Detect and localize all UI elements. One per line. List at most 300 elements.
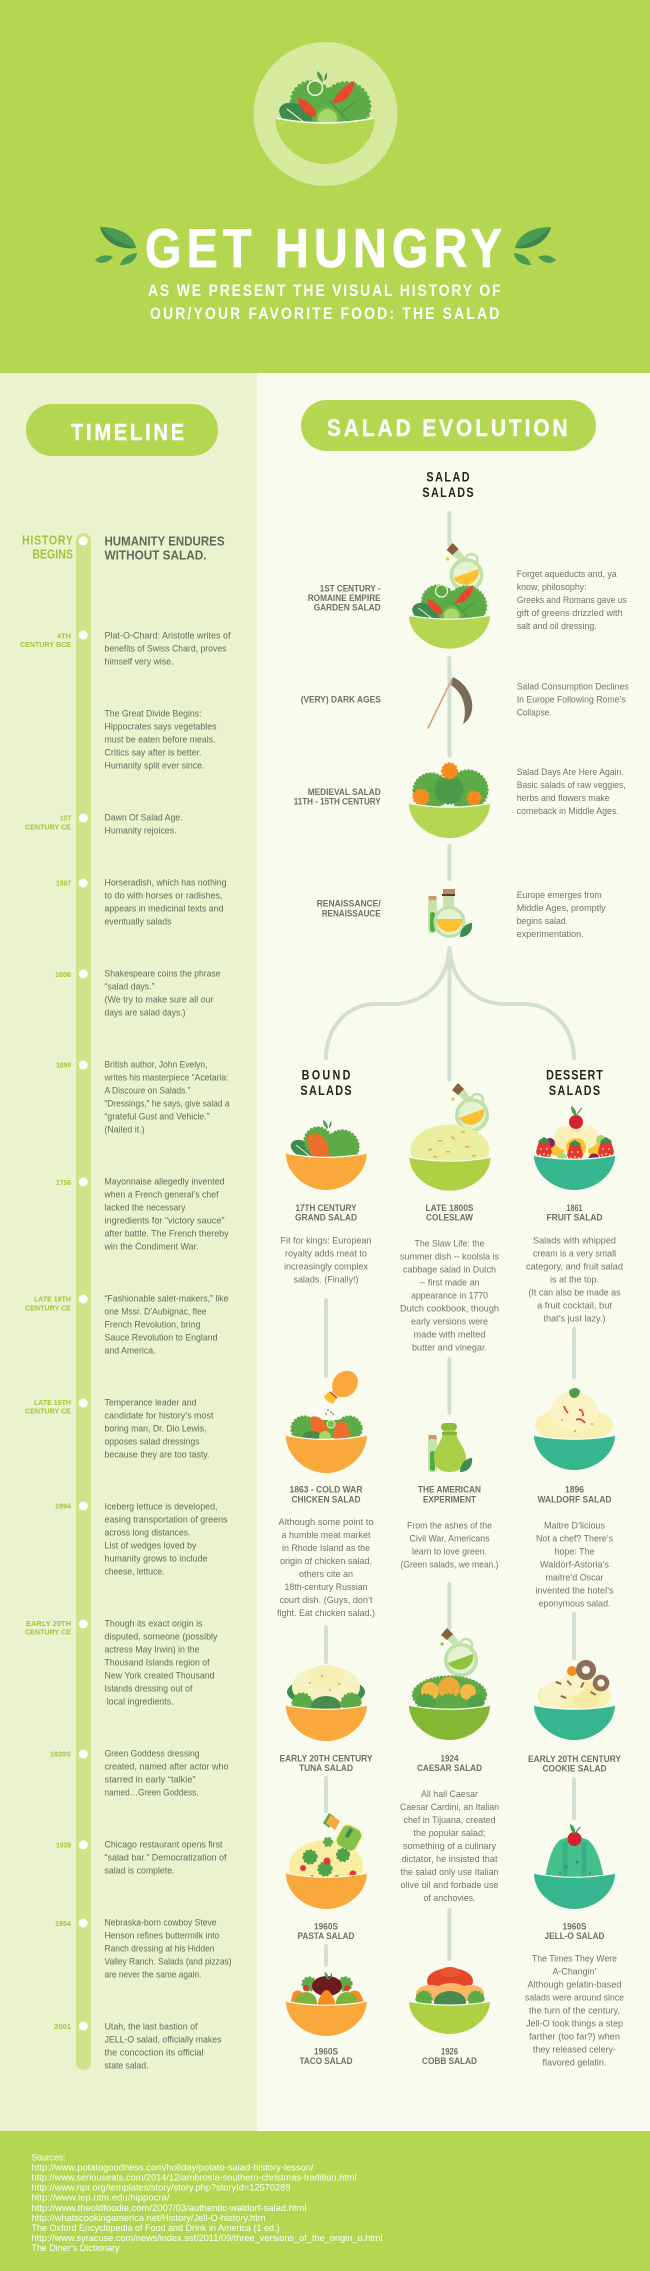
label: cobb salad: COBB SALAD: [422, 2056, 477, 2066]
card: chicken salad: [277, 1366, 375, 1618]
text: chicken salad: fight. Eat chicken salad.): [277, 1608, 375, 1618]
label: history begins: [22, 534, 73, 562]
timeline event text: “Fashionable salet-makers,” like: [104, 1294, 228, 1304]
text: dark ages: Collapse.: [517, 708, 552, 718]
panel: timeline background: [0, 373, 257, 2131]
label: cookie salad: EARLY 20TH CENTURY: [528, 1754, 621, 1764]
connector lines: [326, 513, 574, 1965]
label: fruit salad: FRUIT SALAD: [546, 1213, 602, 1223]
text: chicken salad: Although some point to: [278, 1517, 374, 1527]
heading: timeline: TIMELINE: [71, 418, 184, 445]
text: dark ages: Salad Consumption Declines: [517, 682, 629, 692]
text: waldorf salad: hope: The: [554, 1546, 594, 1556]
timeline event text: humanity grows to include: [104, 1554, 208, 1564]
heading: humanity endures: [104, 535, 224, 562]
text: medieval salad: herbs and flowers make: [517, 793, 610, 803]
text: caesar salad: All hail Caesar: [421, 1789, 478, 1799]
timeline date labels: 1939: [56, 1841, 71, 1850]
icon: scythe: [428, 677, 472, 728]
text: caesar salad: [400, 1789, 499, 1903]
text: chicken salad: [277, 1517, 375, 1618]
timeline date labels: CENTURY CE: [25, 1303, 71, 1312]
text: renaissance: Europe emerges from: [517, 890, 602, 900]
text: chicken salad: others cite an: [299, 1569, 353, 1579]
timeline date labels: [20, 632, 72, 2031]
label: caesar salad: CAESAR SALAD: [417, 1763, 482, 1773]
text: american experiment: (Green salads, we mean.): [400, 1559, 498, 1569]
text: jell-o salad: salads were around since: [525, 1993, 624, 2003]
text: caesar salad: the popular salad;: [414, 1828, 486, 1838]
stage: medieval salad: [294, 764, 626, 838]
text: coleslaw: cabbage salad in Dutch: [403, 1265, 496, 1275]
timeline event text: Plat-O-Chard: Aristotle writes of: [104, 631, 231, 641]
text: caesar salad: the salad only use Italian: [400, 1867, 498, 1877]
timeline event text: across long distances.: [104, 1528, 190, 1538]
text: waldorf salad: invented the hotel’s: [536, 1585, 614, 1595]
label: fruit salad: 1861: [566, 1203, 583, 1213]
text: coleslaw: made with melted: [414, 1330, 486, 1340]
text: grand salad: increasingly complex: [284, 1261, 368, 1271]
timeline event text: Critics say after is better.: [104, 748, 202, 758]
label: fruit salad: [546, 1203, 602, 1223]
timeline event text: eventually salads: [104, 917, 172, 927]
label: coleslaw: COLESLAW: [426, 1213, 474, 1223]
text: waldorf salad: eponymous salad.: [538, 1598, 610, 1608]
text: garden salad: salt and oil dressing.: [517, 621, 597, 631]
text: coleslaw: butter and vinegar.: [412, 1343, 487, 1353]
timeline date labels: 2001: [54, 2022, 72, 2031]
timeline event text: ingredients for “victory sauce”: [104, 1216, 224, 1226]
heading: bound salads: [300, 1067, 352, 1098]
subtitle: OUR/YOUR FAVORITE FOOD: THE SALAD: [150, 305, 499, 323]
text: garden salad: [517, 569, 627, 631]
icon: waldorf salad bowl: [534, 1388, 615, 1470]
timeline event text: Humanity rejoices.: [104, 826, 176, 836]
text: sources: http://www.syracuse.com/news/index.ssf/2011/09/three_versions_of_the_origin_o.html: [32, 2233, 382, 2243]
timeline event text: are never the same again.: [104, 1970, 202, 1980]
label: tuna salad: TUNA SALAD: [299, 1763, 353, 1773]
timeline event text: named…Green Goddess.: [104, 1788, 198, 1798]
icon: green bottle and tube: [428, 1423, 472, 1472]
text: caesar salad: something of a culinary: [403, 1841, 496, 1851]
text: renaissance: Middle Ages, promptly: [517, 903, 606, 913]
heading: salad salads: SALADS: [422, 485, 474, 500]
text: waldorf salad: Not a chef? There’s: [536, 1533, 613, 1543]
label: waldorf salad: 1896: [565, 1485, 584, 1495]
text: sources: http://www.theoldfoodie.com/2007/03/authentic-waldorf-salad.html: [32, 2203, 307, 2213]
text: chicken salad: a humble meat market: [282, 1530, 371, 1540]
text: medieval salad: comeback in Middle Ages.: [517, 806, 619, 816]
card: coleslaw: [400, 1083, 499, 1353]
timeline event text: “grateful Gust and Vehicle.”: [104, 1112, 210, 1122]
text: coleslaw: -- first made an: [420, 1278, 480, 1288]
label: history begins: BEGINS: [32, 548, 73, 562]
timeline event text: lacked the necessary: [104, 1203, 186, 1213]
text: garden salad: gift of greens drizzled with: [517, 608, 623, 618]
card: pasta salad: [286, 1813, 367, 1941]
timeline event text: must be eaten before meals.: [104, 735, 216, 745]
text: sources: The Oxford Encyclopedia of Food and Drink in America (1 ed.): [32, 2223, 280, 2233]
icon: jell-o mold bowl: [534, 1824, 615, 1909]
text: jell-o salad: The Times They Were: [532, 1954, 617, 1964]
label: cobb salad: 1926: [441, 2047, 458, 2057]
label: american experiment: THE AMERICAN: [418, 1485, 481, 1495]
text: coleslaw: summer dish -- koolsla is: [400, 1252, 499, 1262]
timeline date labels: 1920S: [50, 1750, 71, 1759]
label: jell-o salad: [544, 1922, 604, 1941]
timeline event text: starred in early “talkie”: [104, 1775, 196, 1785]
icon: taco salad bowl: [286, 1972, 367, 2036]
timeline event text: local ingredients.: [107, 1697, 174, 1707]
timeline event text: disputed, someone (possibly: [104, 1632, 218, 1642]
label: cookie salad: COOKIE SALAD: [542, 1764, 606, 1774]
timeline event text: salad is complete.: [104, 1866, 174, 1876]
timeline date labels: 1954: [55, 1919, 72, 1928]
label: grand salad: GRAND SALAD: [295, 1213, 357, 1223]
text: waldorf salad: maitre’d Oscar: [546, 1572, 604, 1582]
icon: right title leaves: [514, 227, 556, 265]
heading: bound salads: SALADS: [300, 1083, 352, 1098]
label: caesar salad: 1924: [440, 1753, 459, 1763]
label: jell-o salad: 1960S: [562, 1922, 587, 1932]
panel: salad evolution background: [257, 373, 650, 2131]
timeline event text: appears in medicinal texts and: [104, 904, 224, 914]
timeline event text: opposes salad dressings: [104, 1436, 200, 1446]
text: coleslaw: early versions were: [411, 1317, 488, 1327]
icon: grand salad bowl: [286, 1120, 367, 1190]
timeline event text: after battle. The French thereby: [104, 1229, 229, 1239]
label: pasta salad: PASTA SALAD: [298, 1931, 354, 1941]
card: jell-o salad: [525, 1824, 624, 2068]
card: waldorf salad: [534, 1388, 615, 1608]
panel: header background: [0, 0, 650, 373]
heading: salad salads: SALAD: [426, 470, 470, 485]
label: waldorf salad: [538, 1485, 612, 1504]
icon: garden salad bowl with oil jar: [409, 543, 490, 649]
timeline event text: created, named after actor who: [104, 1762, 228, 1772]
text: jell-o salad: farther (too far?) when: [529, 2032, 620, 2042]
text: caesar salad: chef in Tijuana, created: [404, 1815, 496, 1825]
icon: chicken salad bowl with shaker: [286, 1366, 367, 1473]
label: cobb salad: [422, 2047, 477, 2066]
card: fruit salad: [526, 1106, 623, 1323]
timeline event text: The Great Divide Begins:: [104, 709, 202, 719]
label: tuna salad: [280, 1753, 373, 1773]
label: renaissance: RENAISSANCE/: [317, 899, 381, 909]
icon: medieval salad bowl: [409, 764, 490, 838]
text: sources: Sources:: [32, 2152, 66, 2162]
heading: humanity endures: HUMANITY ENDURES: [104, 535, 224, 549]
text: waldorf salad: Maitre D’licious: [544, 1520, 605, 1530]
timeline event text: British author, John Evelyn,: [104, 1060, 208, 1070]
text: sources: http://www.seriouseats.com/2014/12/ambrosia-southern-christmas-tradition.html: [32, 2172, 356, 2182]
text: chicken salad: in Rhode Island as the: [282, 1543, 370, 1553]
timeline event text: the concoction its official: [104, 2048, 204, 2058]
timeline event text: cheese, lettuce.: [104, 1567, 164, 1577]
timeline event text: Green Goddess dressing: [104, 1749, 200, 1759]
timeline event text: (We try to make sure all our: [104, 995, 214, 1005]
icon: cobb salad bowl: [409, 1967, 490, 2034]
timeline event text: and America.: [104, 1346, 156, 1356]
timeline bar: [76, 533, 91, 2070]
text: fruit salad: cream is a very small: [533, 1248, 616, 1258]
stage: renaissance: [317, 889, 606, 939]
timeline date labels: CENTURY CE: [25, 1406, 71, 1415]
timeline date labels: 1894: [55, 1502, 72, 1511]
label: cookie salad: [528, 1754, 621, 1774]
timeline event text: New York created Thousand: [104, 1671, 214, 1681]
stage: garden salad: [308, 543, 627, 649]
label: garden salad: [308, 583, 381, 613]
timeline event text: Iceberg lettuce is developed,: [104, 1502, 218, 1512]
timeline event text: “salad days.”: [104, 982, 154, 992]
heading: bound salads: BOUND: [302, 1067, 351, 1083]
text: fruit salad: is at the top.: [550, 1274, 599, 1284]
label: american experiment: [418, 1485, 481, 1504]
text: renaissance: begins salad: [517, 916, 566, 926]
stage: dark ages: [301, 677, 629, 728]
text: medieval salad: Salad Days Are Here Again.: [517, 767, 624, 777]
icon: fruit salad bowl: [534, 1106, 615, 1190]
icon: oil bottle and herb tube: [428, 889, 472, 938]
label: history begins: HISTORY: [22, 534, 73, 548]
timeline event text: Nebraska-born cowboy Steve: [104, 1918, 216, 1928]
text: caesar salad: olive oil and forbade use: [400, 1880, 498, 1890]
timeline date labels: 4TH: [57, 632, 71, 640]
text: coleslaw: [400, 1239, 499, 1353]
text: grand salad: salads. (Finally!): [294, 1274, 358, 1284]
text: garden salad: know, philosophy:: [517, 582, 587, 592]
timeline event text: days are salad days.): [104, 1008, 186, 1018]
text: medieval salad: [517, 767, 626, 816]
timeline event text: one Mssr. D’Aubignac, flee: [104, 1307, 206, 1317]
timeline date labels: 1606: [55, 970, 71, 979]
timeline event text: state salad.: [104, 2061, 148, 2071]
label: american experiment: EXPERIMENT: [423, 1494, 477, 1504]
timeline event text: to do with horses or radishes,: [104, 890, 222, 900]
timeline event text: Dawn Of Salad Age.: [104, 813, 182, 823]
text: renaissance: [517, 890, 606, 939]
icon: coleslaw bowl with jar: [410, 1083, 490, 1191]
timeline event text: Hippocrates says vegetables: [104, 722, 217, 732]
timeline date labels: CENTURY CE: [25, 1628, 71, 1637]
text: coleslaw: The Slaw Life: the: [414, 1239, 484, 1249]
card: american experiment: [400, 1423, 498, 1569]
text: chicken salad: 18th-century Russian: [284, 1582, 368, 1592]
icon: caesar salad bowl with jar: [409, 1628, 490, 1740]
card: cobb salad: [409, 1967, 490, 2066]
label: medieval salad: MEDIEVAL SALAD: [308, 787, 381, 797]
text: sources: [32, 2152, 382, 2253]
text: dark ages: [517, 682, 629, 718]
text: caesar salad: Caesar Cardini, an Italian: [400, 1802, 499, 1812]
heading: dessert salads: SALADS: [549, 1083, 600, 1098]
card: caesar salad: [400, 1628, 499, 1903]
text: sources: The Diner’s Dictionary: [32, 2243, 120, 2253]
subtitle: [148, 282, 501, 323]
label: chicken salad: [290, 1485, 363, 1504]
timeline event text: Shakespeare coins the phrase: [104, 969, 220, 979]
timeline event text: Valley Ranch. Salads (and pizzas): [104, 1957, 232, 1967]
text: fruit salad: a fruit cocktail, but: [537, 1300, 612, 1310]
timeline date labels: CENTURY CE: [25, 822, 71, 831]
text: sources: http://www.potatogoodness.com/holiday/potato-salad-history-lesson/: [32, 2162, 314, 2172]
label: garden salad: ROMAINE EMPIRE: [308, 593, 381, 603]
text: jell-o salad: they released celery-: [533, 2045, 616, 2055]
timeline date labels: 1756: [56, 1178, 71, 1187]
heading: humanity endures: WITHOUT SALAD.: [104, 548, 206, 562]
text: sources: http://www.npr.org/templates/story/story.php?storyId=12570289: [32, 2183, 290, 2193]
text: coleslaw: appearance in 1770: [411, 1291, 488, 1301]
text: american experiment: learn to love green.: [412, 1546, 487, 1556]
timeline event text: Though its exact origin is: [104, 1619, 203, 1629]
icon: pasta salad bowl with bottle: [286, 1813, 367, 1909]
icon: tuna salad bowl: [286, 1665, 367, 1741]
timeline date labels: LATE 18TH: [34, 1295, 71, 1304]
timeline event text: win the Condiment War.: [104, 1242, 198, 1252]
text: jell-o salad: [525, 1954, 624, 2068]
label: grand salad: 17TH CENTURY: [296, 1203, 357, 1213]
timeline event text: Henson refines buttermilk into: [104, 1931, 220, 1941]
icon: header salad bowl emblem: [254, 42, 398, 186]
icon: cookie salad bowl: [534, 1663, 615, 1740]
label: renaissance: [317, 899, 381, 918]
timeline date labels: CENTURY BCE: [20, 640, 71, 649]
label: pasta salad: [298, 1922, 354, 1941]
label: taco salad: TACO SALAD: [300, 2056, 352, 2066]
label: taco salad: 1960S: [314, 2047, 338, 2057]
timeline date labels: 1ST: [60, 814, 71, 823]
timeline event text: easing transportation of greens: [104, 1515, 228, 1525]
text: garden salad: Forget aqueducts and, ya: [517, 569, 617, 579]
timeline event text: List of wedges loved by: [104, 1541, 197, 1551]
text: caesar salad: dictator, he insisted that: [402, 1854, 498, 1864]
text: american experiment: From the ashes of the: [407, 1520, 492, 1530]
timeline event text: (Nailed it.): [104, 1125, 144, 1135]
subtitle: AS WE PRESENT THE VISUAL HISTORY OF: [148, 282, 501, 300]
label: chicken salad: 1863 - COLD WAR: [290, 1485, 363, 1495]
text: sources: http://www.iep.utm.edu/hippocra/: [32, 2193, 170, 2203]
timeline event text: writes his masterpiece “Acetaria:: [104, 1073, 228, 1083]
text: grand salad: Fit for kings: European: [280, 1235, 372, 1245]
panel: footer: [0, 2131, 650, 2271]
label: jell-o salad: JELL-O SALAD: [544, 1931, 604, 1941]
label: garden salad: 1ST CENTURY -: [320, 583, 381, 593]
timeline event text: Sauce Revolution to England: [104, 1333, 218, 1343]
text: fruit salad: Salads with whipped: [533, 1235, 616, 1245]
timeline event text: JELL-O salad, officially makes: [104, 2035, 222, 2045]
label: waldorf salad: WALDORF SALAD: [538, 1494, 612, 1504]
text: medieval salad: Basic salads of raw veggies,: [517, 780, 626, 790]
timeline event text: candidate for history’s most: [104, 1410, 214, 1420]
card: tuna salad: [280, 1665, 373, 1773]
text: fruit salad: [526, 1235, 623, 1323]
label: grand salad: [295, 1203, 357, 1223]
timeline event text: Mayonnaise allegedly invented: [104, 1177, 224, 1187]
text: jell-o salad: A-Changin’: [552, 1967, 596, 1977]
text: sources: http://whatscookingamerica.net/History/Jell-O-history.htm: [32, 2213, 266, 2223]
text: waldorf salad: Waldorf-Astoria’s: [540, 1559, 609, 1569]
label: medieval salad: 11TH - 15TH CENTURY: [294, 797, 381, 807]
timeline date labels: 1597: [56, 878, 71, 888]
label: medieval salad: [294, 787, 381, 807]
timeline date labels: EARLY 20TH: [26, 1619, 71, 1628]
card: grand salad: [280, 1120, 372, 1284]
title: GET HUNGRY: [145, 217, 502, 279]
heading: dessert salads: DESSERT: [546, 1067, 603, 1083]
heading: salad salads: [422, 470, 474, 500]
timeline date labels: LATE 19TH: [34, 1398, 71, 1407]
text: american experiment: Civil War, Americans: [410, 1533, 490, 1543]
panel: timeline: [20, 533, 232, 2071]
timeline event text: Chicago restaurant opens first: [104, 1840, 223, 1850]
label: coleslaw: LATE 1800S: [426, 1203, 474, 1213]
timeline event text: Thousand Islands region of: [104, 1658, 210, 1668]
timeline event text: when a French general’s chef: [104, 1190, 219, 1200]
timeline event text: Temperance leader and: [104, 1397, 196, 1407]
label: pasta salad: 1960S: [314, 1922, 338, 1932]
heading: salad evolution: SALAD EVOLUTION: [327, 413, 568, 441]
timeline event text: “salad bar.” Democratization of: [104, 1853, 227, 1863]
text: jell-o salad: the turn of the century,: [529, 2006, 620, 2016]
heading: salad evolution: [301, 400, 596, 451]
timeline date labels: 1699: [56, 1060, 71, 1070]
timeline event text: Horseradish, which has nothing: [104, 877, 226, 887]
text: chicken salad: court dish. (Guys, don’t: [280, 1595, 373, 1605]
timeline event text: A Discoure on Salads.”: [104, 1086, 190, 1096]
timeline dots: [79, 536, 88, 2030]
timeline event text: boring man, Dr. Dio Lewis,: [104, 1423, 206, 1433]
text: garden salad: Greeks and Romans gave us: [517, 595, 627, 605]
text: coleslaw: Dutch cookbook, though: [400, 1304, 499, 1314]
timeline event text: because they are too tasty.: [104, 1449, 210, 1459]
card: taco salad: [286, 1972, 367, 2066]
label: caesar salad: [417, 1753, 482, 1773]
timeline event text: Islands dressing out of: [104, 1684, 193, 1694]
label: tuna salad: EARLY 20TH CENTURY: [280, 1753, 373, 1763]
text: chicken salad: origin of chicken salad,: [280, 1556, 372, 1566]
timeline event text: Humanity split ever since.: [104, 761, 204, 771]
label: taco salad: [300, 2047, 352, 2066]
card: cookie salad: [528, 1663, 621, 1774]
label: renaissance: RENAISSAUCE: [322, 908, 381, 918]
timeline event text: actress May Irwin) in the: [104, 1645, 200, 1655]
panel: salad evolution: [277, 470, 629, 2068]
timeline event text: “Dressings,” he says, give salad a: [104, 1099, 230, 1109]
timeline event text: Utah, the last bastion of: [104, 2022, 198, 2032]
timeline event text: Ranch dressing at his Hidden: [104, 1944, 214, 1954]
timeline event text: French Revolution, bring: [104, 1320, 200, 1330]
text: fruit salad: category, and fruit salad: [526, 1261, 623, 1271]
text: fruit salad: (It can also be made as: [528, 1287, 621, 1297]
icon: left title leaves: [95, 227, 137, 265]
text: grand salad: [280, 1235, 372, 1284]
timeline event text: benefits of Swiss Chard, proves: [104, 644, 227, 654]
text: waldorf salad: [536, 1520, 614, 1608]
text: grand salad: royalty adds meat to: [285, 1248, 367, 1258]
label: coleslaw: [426, 1203, 474, 1223]
text: jell-o salad: flavored gelatin.: [542, 2058, 606, 2068]
heading: dessert salads: [546, 1067, 603, 1098]
text: jell-o salad: Jell-O took things a step: [526, 2019, 623, 2029]
timeline event text: himself very wise.: [104, 657, 174, 667]
text: renaissance: experimentation.: [517, 929, 584, 939]
label: dark ages: (VERY) DARK AGES: [301, 694, 381, 704]
text: american experiment: [400, 1520, 498, 1569]
text: caesar salad: of anchovies.: [424, 1893, 476, 1903]
label: garden salad: GARDEN SALAD: [314, 603, 381, 613]
timeline event text: [104, 631, 232, 2071]
